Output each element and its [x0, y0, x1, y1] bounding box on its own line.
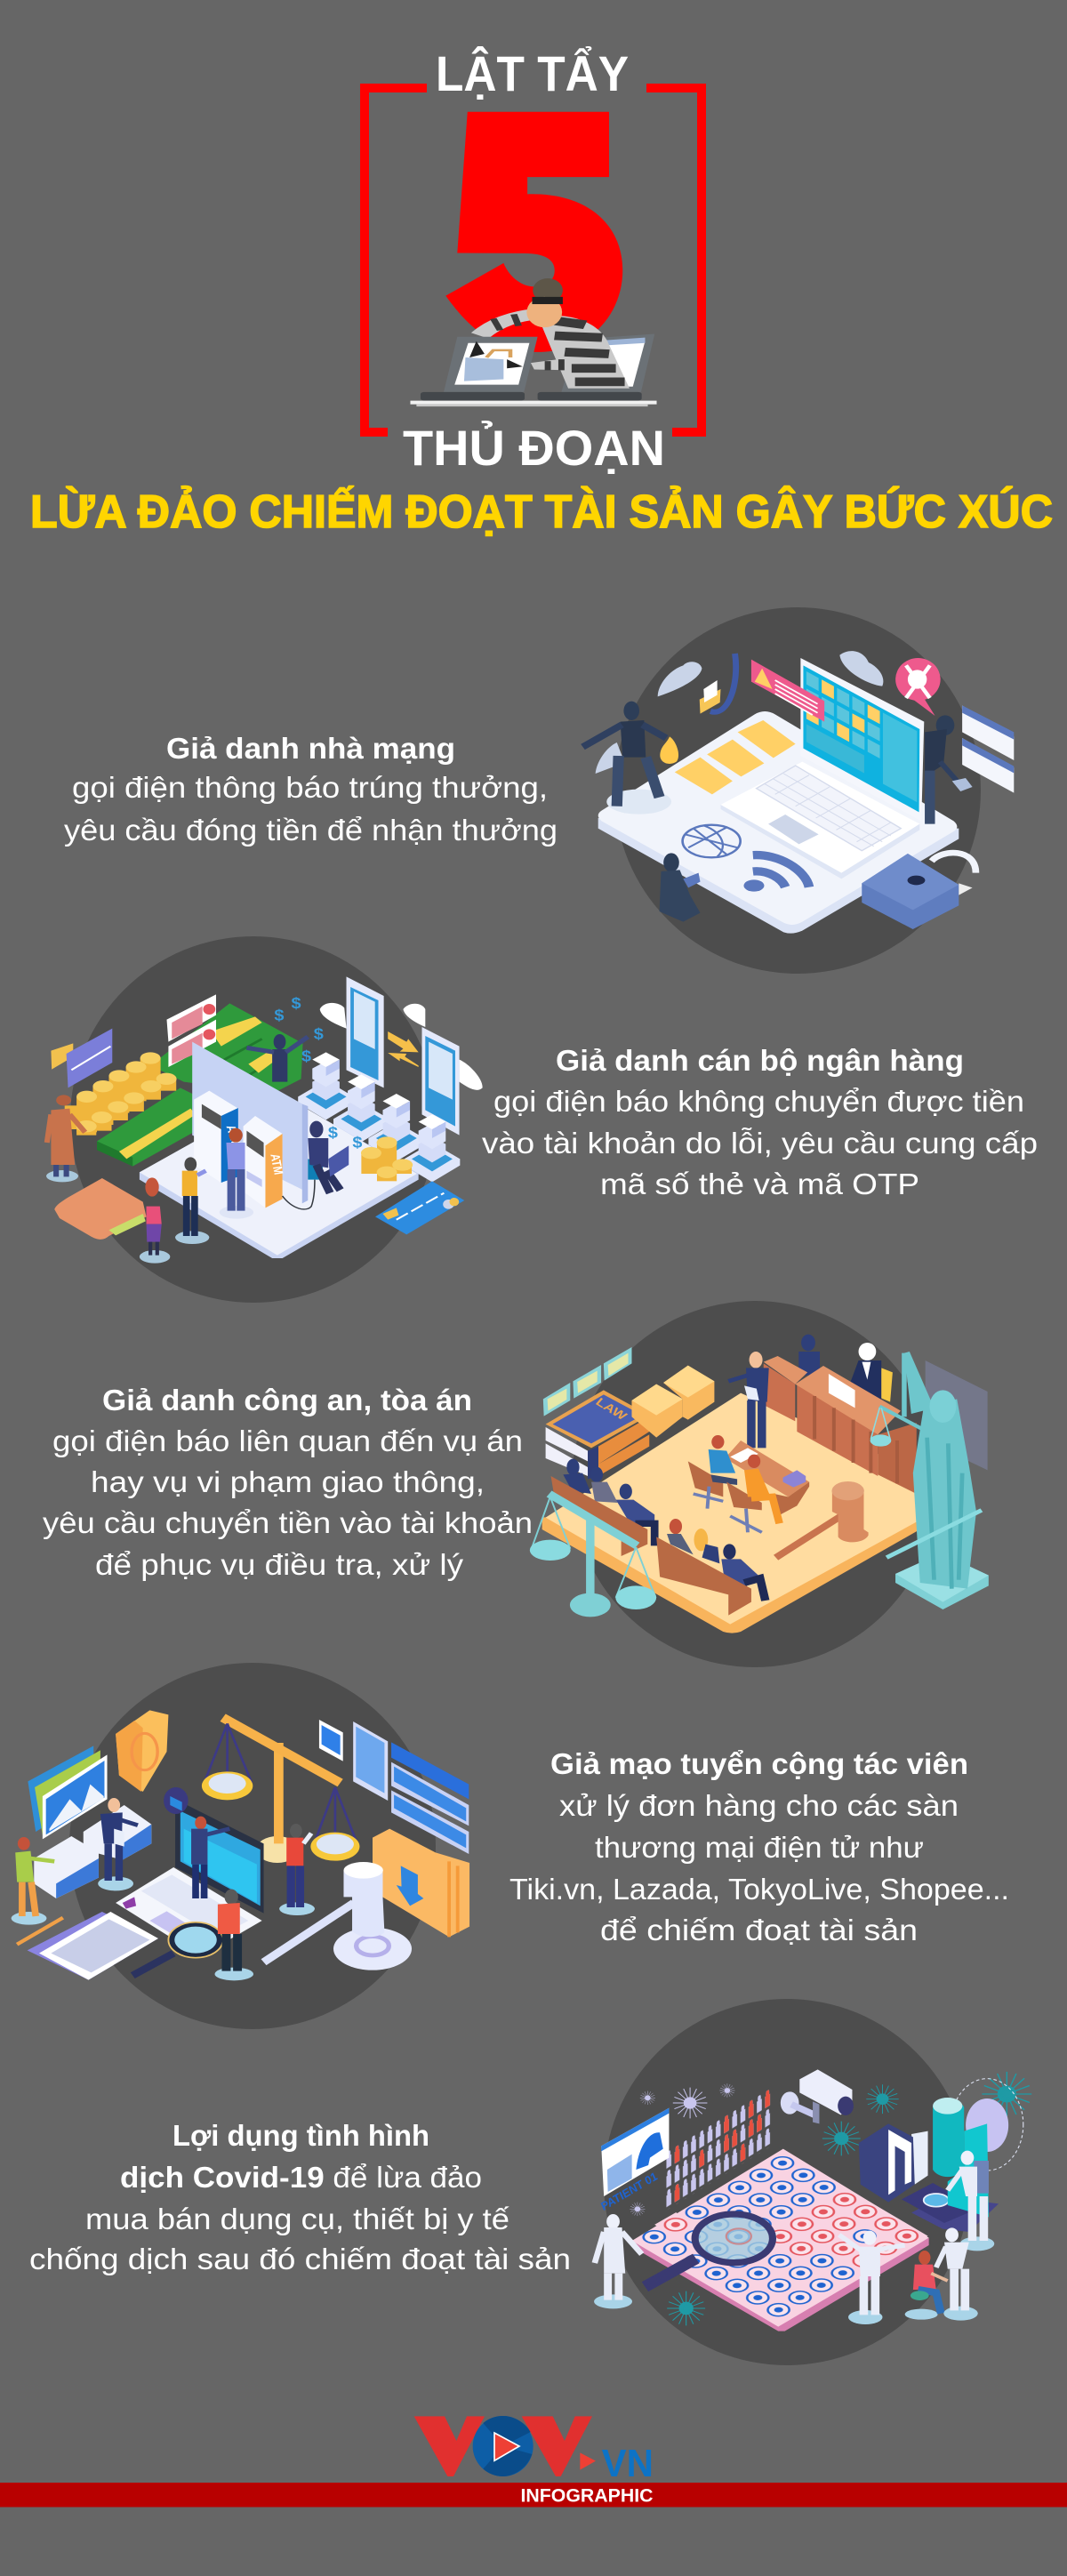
illustration: pandemic tracing	[594, 2069, 1031, 2331]
title: THỦ ĐOẠN: THỦ ĐOẠN	[403, 420, 665, 476]
judge bench	[797, 1384, 878, 1476]
big number 5 and thief illustration	[410, 112, 657, 406]
red footer band	[0, 2483, 1067, 2508]
person: red vest	[279, 1824, 315, 1915]
text block: dịch Covid-19 để lừa đảo	[120, 2161, 482, 2194]
cash stacks	[160, 1003, 303, 1094]
thief crouching	[660, 853, 700, 922]
gold scale	[202, 1718, 359, 1863]
text block	[482, 1044, 1038, 1200]
person: detective	[46, 1095, 85, 1182]
text block: để chiếm đoạt tài sản	[600, 1914, 918, 1946]
game board	[632, 2238, 929, 2331]
ATM machines: ATM	[268, 1152, 286, 1176]
person: phone call	[214, 1890, 253, 1980]
person: green shirt	[12, 1837, 54, 1925]
text block: hay vụ vi phạm giao thông,	[91, 1465, 485, 1498]
illustration backdrop circle	[69, 1663, 436, 2029]
wallet	[54, 1178, 147, 1240]
header	[30, 45, 1053, 538]
contact circles grid	[633, 2151, 928, 2322]
text block: gọi điện báo không chuyển được tiền	[493, 1085, 1024, 1118]
panel: impersonating carrier	[64, 607, 1014, 974]
contact tracing figures	[665, 2088, 772, 2211]
person: hazmat left	[594, 2214, 642, 2308]
icon: skull speech bubble	[895, 658, 941, 701]
patient screen	[598, 2108, 669, 2212]
list panels	[391, 1742, 469, 1799]
document boxes	[631, 1384, 683, 1438]
text block: Giả danh công an, tòa án	[102, 1384, 472, 1416]
blue credit card	[375, 1181, 464, 1234]
panel: impersonating bank staff	[46, 936, 1038, 1303]
illustration: hacked laptop on platform	[582, 651, 1014, 934]
coins on platform	[361, 1143, 412, 1181]
panel: impersonating police and court	[43, 1301, 989, 1667]
CCTV camera	[781, 2069, 854, 2123]
person: hazmat doctor	[936, 2227, 978, 2321]
phones	[347, 976, 384, 1087]
text block: Lợi dụng tình hình	[172, 2119, 429, 2152]
witness desk and bailiff	[764, 1335, 820, 1421]
folders	[675, 720, 796, 794]
coin columns	[65, 1058, 176, 1136]
seated person orange	[726, 1455, 780, 1532]
text block: mã số thẻ và mã OTP	[600, 1168, 919, 1200]
dollar signs: $	[314, 1025, 325, 1042]
text block: để phục vụ điều tra, xử lý	[95, 1548, 464, 1581]
person: thief with laptop	[308, 1121, 349, 1193]
server stacks	[298, 1052, 354, 1119]
footer logo	[0, 2416, 1067, 2508]
illustration backdrop circle	[604, 1999, 970, 2365]
popup windows	[962, 705, 1014, 793]
illustration backdrop circle	[70, 936, 437, 1303]
magnifying glass	[645, 2214, 773, 2287]
microscope	[902, 2098, 999, 2232]
text block: Tiki.vn, Lazada, TokyoLive, Shopee...	[509, 1873, 1009, 1906]
laptop screen	[800, 658, 924, 821]
person: man with phone	[175, 1157, 209, 1244]
subtitle in yellow: LỪA ĐẢO CHIẾM ĐOẠT TÀI SẢN GÂY BỨC XÚC	[30, 486, 1053, 538]
image panels	[28, 1745, 93, 1832]
icon: globe	[683, 825, 741, 857]
servers	[84, 1805, 151, 1860]
lawyer standing	[728, 1352, 769, 1448]
text block: vào tài khoản do lỗi, yêu cầu cung cấp	[482, 1127, 1038, 1160]
defence table	[725, 1440, 809, 1497]
dollar signs: $	[352, 1134, 363, 1151]
platform	[140, 1109, 419, 1258]
ATM machines: ATM	[223, 1124, 244, 1147]
clouds	[596, 651, 883, 774]
person: suit	[98, 1798, 138, 1890]
icon: thief with laptops	[410, 278, 657, 406]
illustration: e-commerce collaborators	[12, 1710, 469, 1980]
seated person blue	[688, 1435, 737, 1509]
number 5	[445, 112, 622, 352]
viruses	[630, 2072, 1031, 2325]
dollar signs: $	[328, 1124, 339, 1141]
icon: fish hook and envelope	[710, 654, 736, 712]
dollar signs: $	[292, 994, 301, 1012]
text block: xử lý đơn hàng cho các sàn	[559, 1789, 959, 1822]
illustration: courtroom	[530, 1335, 989, 1633]
thief left with money bag	[582, 702, 678, 807]
text block	[29, 2119, 571, 2275]
dollar signs: $	[301, 1047, 312, 1064]
courtroom floor	[542, 1491, 969, 1633]
person: hazmat arms out	[839, 2231, 905, 2324]
wall	[192, 1042, 306, 1192]
title: LẬT TẨY: LẬT TẨY	[436, 45, 629, 101]
law books	[546, 1390, 649, 1479]
VOV logo: VN	[602, 2443, 654, 2485]
globe	[951, 2079, 1023, 2171]
thief right with plug	[925, 715, 973, 824]
paper document and pen	[28, 1912, 158, 1980]
text block	[64, 732, 558, 847]
text block: yêu cầu chuyển tiền vào tài khoản	[43, 1506, 533, 1539]
VOV logo	[414, 2416, 654, 2485]
text block: thương mại điện tử như	[595, 1831, 924, 1864]
text block	[43, 1384, 533, 1581]
small screens	[543, 1347, 631, 1416]
audience bench back-left	[551, 1459, 654, 1556]
text block: yêu cầu đóng tiền để nhận thưởng	[64, 814, 558, 847]
judge	[850, 1343, 893, 1402]
person: seated patient	[905, 2251, 948, 2320]
text block: chống dịch sau đó chiếm đoạt tài sản	[29, 2243, 571, 2275]
laptop	[116, 1787, 264, 1956]
thief arms raised	[246, 1034, 308, 1082]
tablet with wifi	[319, 1720, 343, 1761]
text block: Giả danh nhà mạng	[166, 732, 455, 765]
document panel	[353, 1721, 388, 1801]
purple credit card and envelope	[51, 1043, 73, 1070]
gavel	[776, 1481, 869, 1558]
text block: Giả danh cán bộ ngân hàng	[556, 1044, 964, 1077]
cable	[283, 1180, 315, 1209]
dollar signs: $	[274, 1007, 285, 1023]
text block	[509, 1747, 1009, 1946]
icon: copyright shield	[116, 1710, 168, 1792]
text block: gọi điện thông báo trúng thưởng,	[72, 771, 548, 804]
icon: scale of justice	[530, 1494, 656, 1617]
panel: fake collaborator recruitment	[12, 1663, 1009, 2029]
text block: gọi điện báo liên quan đến vụ án	[52, 1424, 523, 1457]
data grid behind statue	[926, 1360, 988, 1470]
icon: wifi	[743, 879, 764, 892]
text block: mua bán dụng cụ, thiết bị y tế	[85, 2203, 509, 2235]
label: INFOGRAPHIC: INFOGRAPHIC	[521, 2486, 653, 2506]
white gavel	[264, 1862, 412, 1970]
person: woman with phone	[140, 1177, 170, 1264]
person: at screen	[191, 1817, 229, 1898]
notification cards	[166, 994, 216, 1067]
red bracket frame	[360, 84, 706, 437]
exchange arrows	[388, 1031, 419, 1067]
dollar signs	[274, 994, 363, 1151]
audience bench front	[656, 1519, 766, 1616]
person: hazmat microscope	[948, 2151, 994, 2251]
binders	[911, 2131, 928, 2185]
panel: exploiting Covid-19	[29, 1999, 1031, 2365]
laptop base	[720, 762, 919, 876]
text block: Giả mạo tuyển cộng tác viên	[550, 1747, 968, 1780]
illustration backdrop circle	[572, 1301, 938, 1667]
statue of justice	[870, 1352, 989, 1609]
icon: broken padlock	[932, 853, 975, 873]
patient screen: PATIENT 01	[598, 2170, 661, 2212]
law books: LAW	[593, 1396, 630, 1424]
illustration: ATM scene	[46, 976, 483, 1264]
illustration backdrop circle	[614, 607, 981, 974]
magnifying glass	[132, 1922, 223, 1976]
ATM machines	[194, 1091, 286, 1208]
folder with arrow	[373, 1829, 469, 1937]
alert banner	[751, 660, 824, 722]
person: man at ATM	[220, 1128, 253, 1219]
clouds	[320, 1003, 483, 1090]
